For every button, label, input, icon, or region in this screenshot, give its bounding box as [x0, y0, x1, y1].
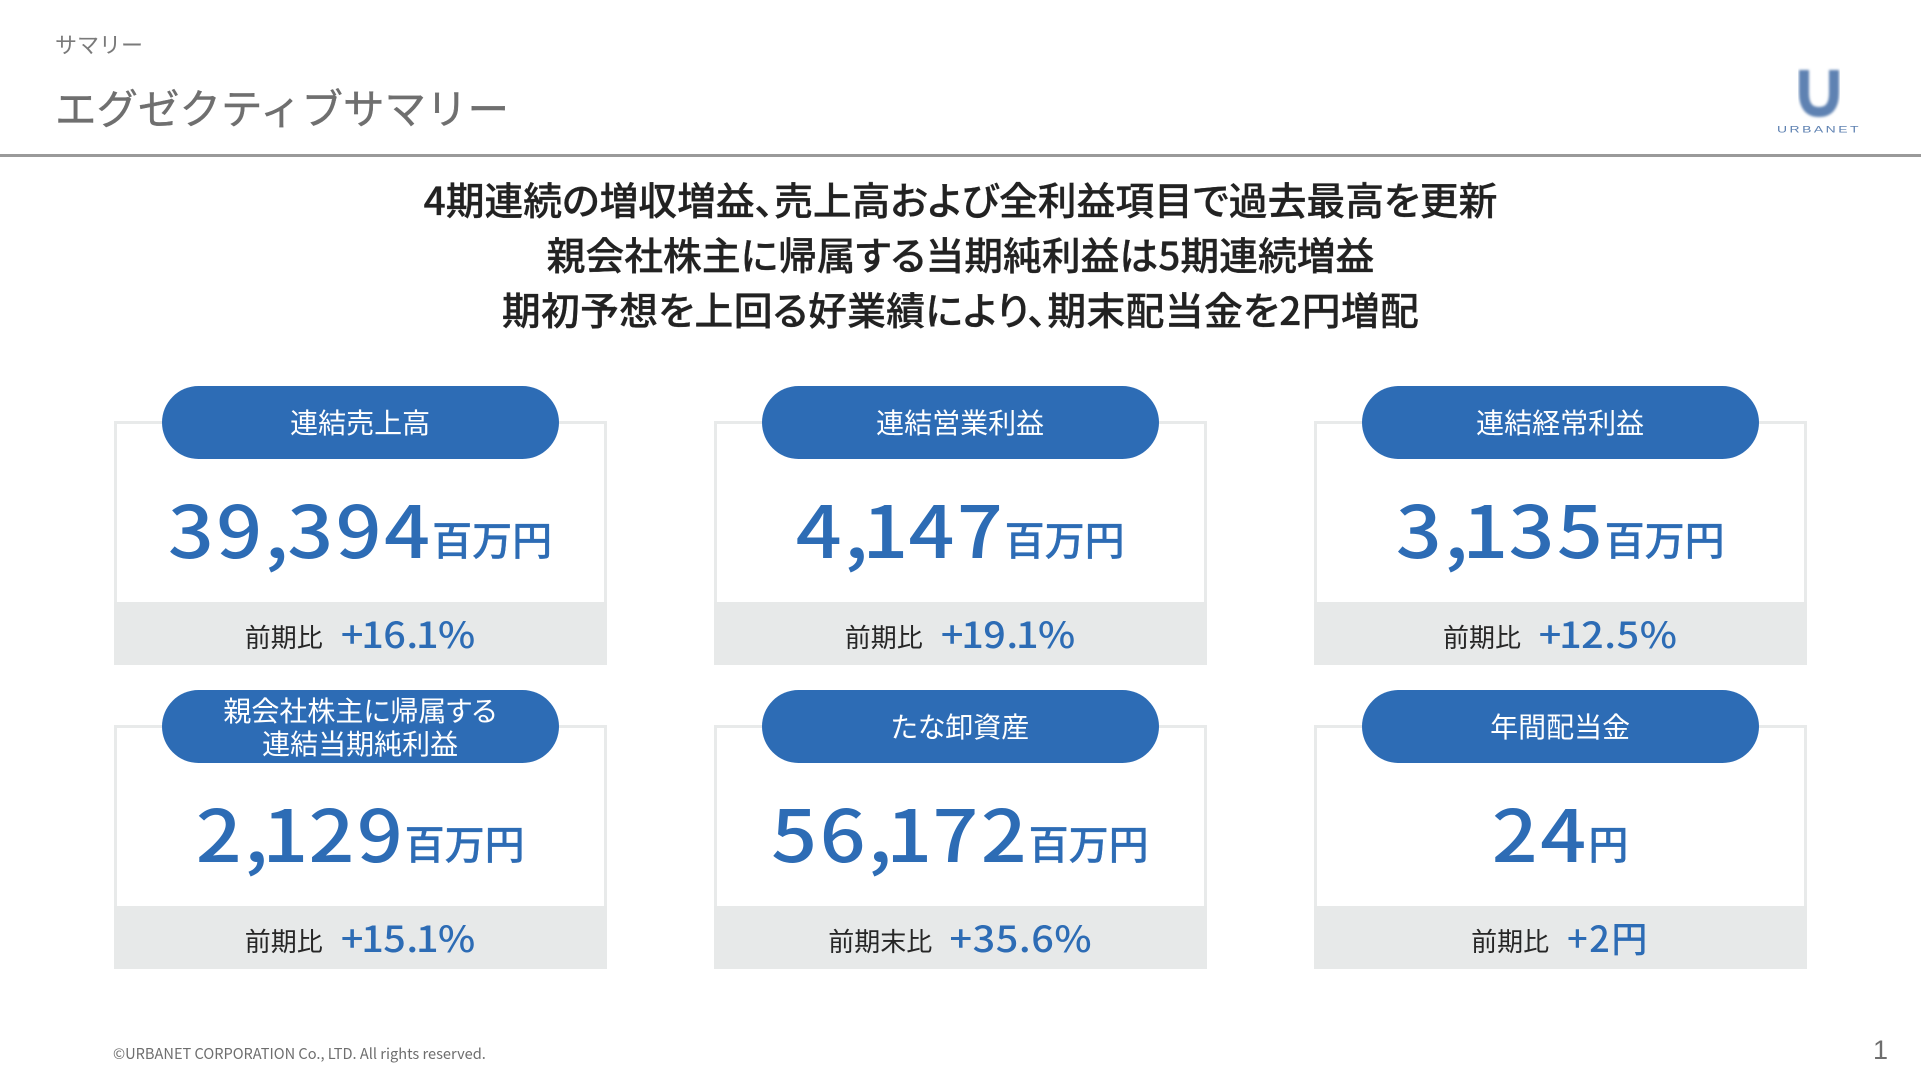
pill heading: 連結営業利益 [876, 402, 1044, 442]
value: 百万円 [1605, 509, 1725, 567]
panel: たな卸資産 [714, 690, 1207, 969]
comparison: +19.1% [941, 607, 1076, 659]
panel: 連結売上高 [114, 386, 607, 665]
value: 24 [1492, 778, 1589, 883]
section label: サマリー [55, 28, 143, 60]
pill heading [762, 690, 1159, 763]
pill heading [162, 690, 559, 763]
value: 56,172 [771, 778, 1029, 883]
comparison: 前期比 [845, 618, 923, 655]
title: エグゼクティブサマリー [55, 76, 509, 136]
value: 百万円 [432, 509, 552, 567]
headline: 4期連続の増収増益、売上高および全利益項目で過去最高を更新 [424, 171, 1497, 227]
headline: 期初予想を上回る好業績により、期末配当金を2円増配 [502, 281, 1419, 337]
comparison [1314, 602, 1807, 665]
pill heading [1362, 386, 1759, 459]
comparison: 前期比 [245, 618, 323, 655]
value: 百万円 [1005, 509, 1125, 567]
pill heading: 連結経常利益 [1476, 402, 1644, 442]
value: 4,147 [795, 474, 1005, 579]
panel: 連結経常利益 [1314, 386, 1807, 665]
comparison: +12.5% [1539, 607, 1677, 659]
header rule [0, 154, 1921, 156]
value [1395, 474, 1725, 579]
value [195, 778, 525, 883]
pill heading: 親会社株主に帰属する [223, 690, 497, 730]
comparison: 前期比 [1471, 922, 1549, 959]
copyright: ©URBANET CORPORATION Co., LTD. All rights reserved. [113, 1043, 486, 1064]
comparison: +2円 [1567, 911, 1649, 963]
comparison: 前期比 [1443, 618, 1521, 655]
pill heading [162, 386, 559, 459]
value [795, 474, 1125, 579]
icon: URBANET logo [1777, 68, 1861, 134]
comparison [114, 906, 607, 969]
pill heading: たな卸資産 [891, 706, 1029, 746]
comparison: +16.1% [341, 607, 476, 659]
panel: 年間配当金 [1314, 690, 1807, 969]
pill heading: 連結売上高 [290, 402, 430, 442]
value: 円 [1588, 813, 1628, 871]
pill heading [1362, 690, 1759, 763]
comparison [114, 602, 607, 665]
comparison [1314, 906, 1807, 969]
pill heading [762, 386, 1159, 459]
icon: URBANET logo: URBANET [1777, 124, 1861, 134]
value: 百万円 [405, 813, 525, 871]
comparison [714, 602, 1207, 665]
headline [424, 171, 1497, 337]
comparison [714, 906, 1207, 969]
panel: 親会社株主に帰属する連結当期純利益 [114, 690, 607, 969]
value [771, 778, 1149, 883]
value: 3,135 [1395, 474, 1605, 579]
page number: 1 [1873, 1035, 1888, 1065]
comparison: 前期末比 [828, 922, 932, 959]
comparison: +35.6% [950, 911, 1092, 963]
pill heading: 年間配当金 [1490, 706, 1630, 746]
comparison: 前期比 [245, 922, 323, 959]
value: 2,129 [195, 778, 405, 883]
value: 39,394 [168, 474, 432, 579]
headline: 親会社株主に帰属する当期純利益は5期連続増益 [547, 226, 1374, 282]
comparison: +15.1% [341, 911, 476, 963]
value [168, 474, 552, 579]
value: 百万円 [1029, 813, 1149, 871]
pill heading: 連結当期純利益 [262, 722, 458, 762]
panel: 連結営業利益 [714, 386, 1207, 665]
